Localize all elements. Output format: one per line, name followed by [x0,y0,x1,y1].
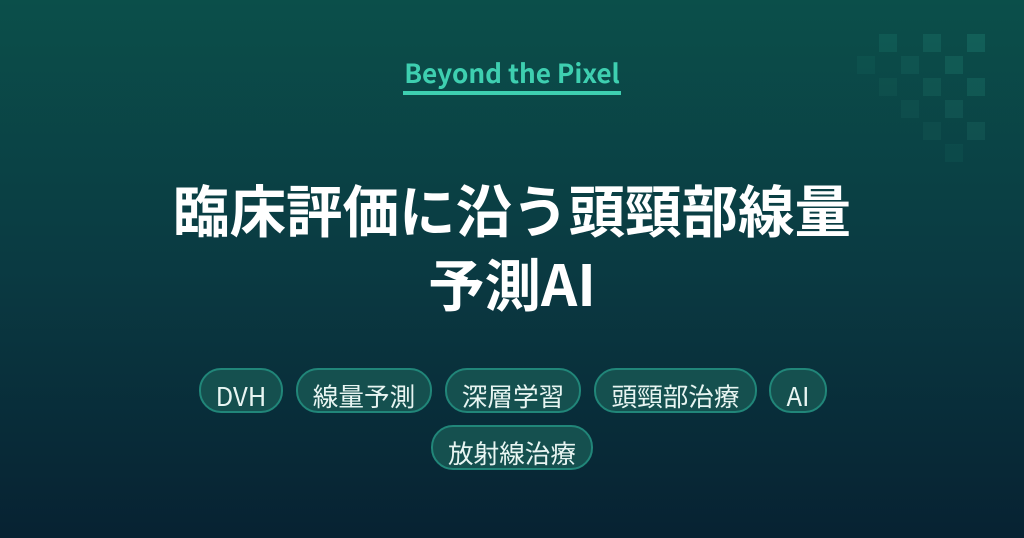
tag: DVH: DVH [216,377,266,414]
kicker: Beyond the Pixel: Beyond the Pixel [404,53,620,91]
tag: 深層学習: 深層学習 [462,377,564,414]
tag: DVH [199,368,283,412]
tag: 線量予測: 線量予測 [313,377,415,414]
decorative pixel grid icon [879,34,985,140]
tag: AI: AI [786,377,810,414]
tag: 深層学習 [445,368,581,412]
title: 臨床評価に沿う頭頸部線量 [173,167,851,249]
tag: 頭頸部治療: 頭頸部治療 [612,377,739,414]
tag: AI [769,368,827,412]
title [173,167,851,323]
tag: 線量予測 [296,368,432,412]
tag: 放射線治療 [431,425,593,470]
title: 予測AI [428,241,596,323]
tag: 放射線治療: 放射線治療 [448,434,576,471]
tag: 頭頸部治療 [594,368,757,412]
